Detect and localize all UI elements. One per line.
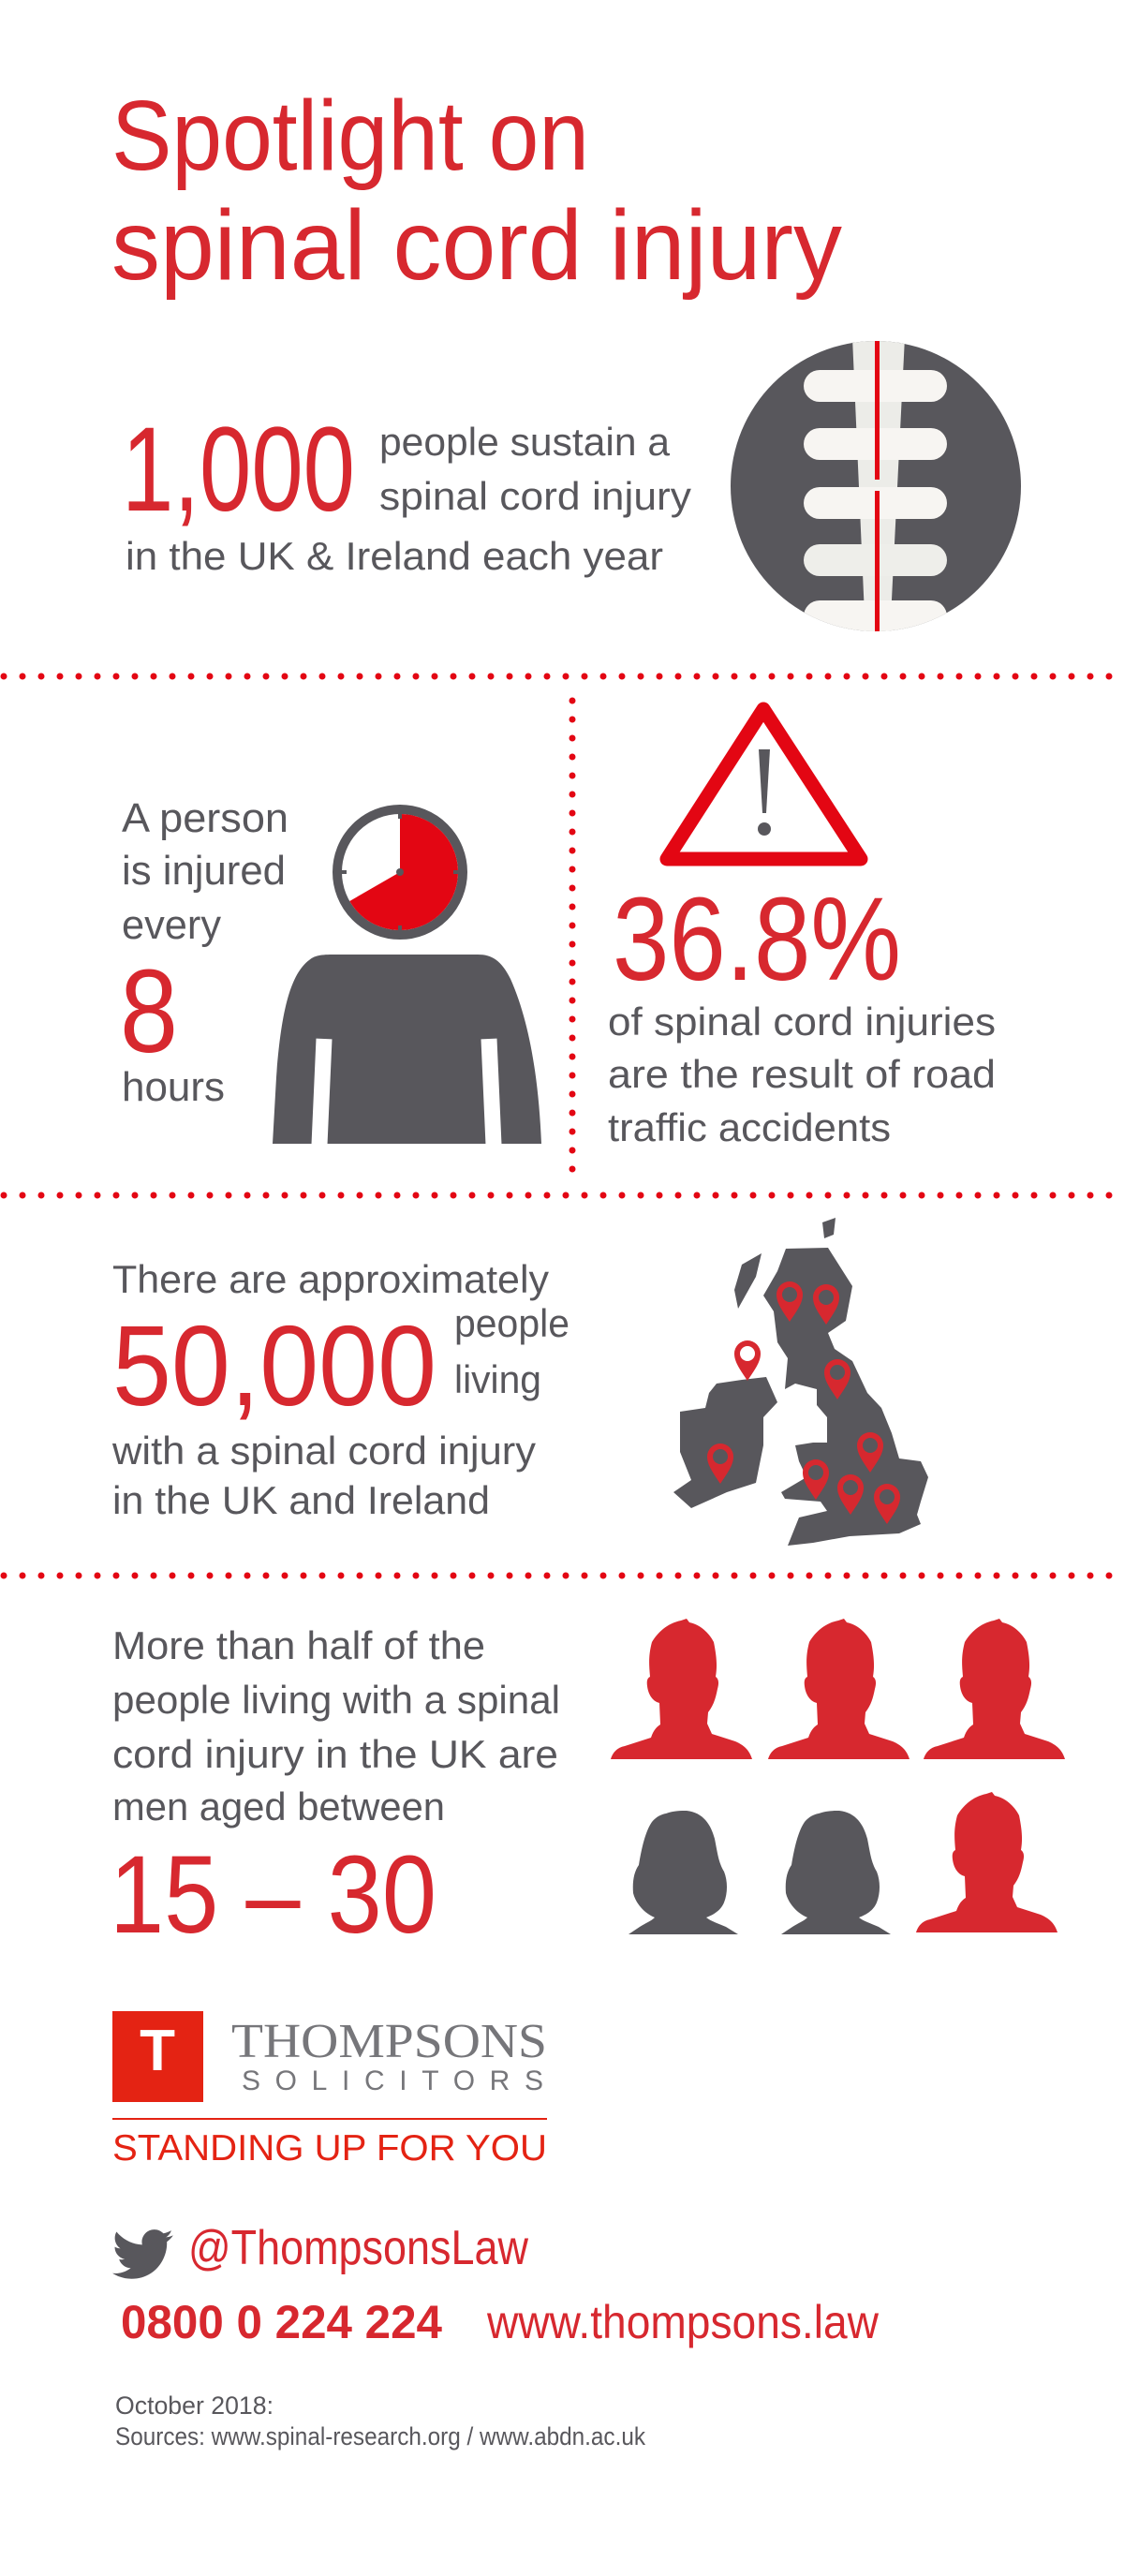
stat: 50,000 living: There are approximately [112, 1257, 549, 1301]
twitter handle [112, 2221, 528, 2279]
stat: 36.8% road traffic: traffic accidents [608, 1105, 891, 1149]
icon: warning triangle [667, 709, 861, 859]
stat: 36.8% road traffic: 36.8% [613, 873, 901, 1005]
stat: 50,000 living: with a spinal cord injury [111, 1429, 536, 1473]
logo: Thompsons Solicitors [112, 2011, 547, 2169]
logo: Thompsons Solicitors: T [140, 2019, 175, 2083]
sources: Sources: www.spinal-research.org / www.abdn.ac.uk [115, 2422, 645, 2450]
text: men aged 15-30 [110, 1623, 560, 1957]
icon: person body [273, 955, 541, 1145]
stat: 50,000 living: 50,000 [112, 1302, 436, 1429]
stat: 1,000 per year: people sustain a [379, 420, 671, 464]
text: men aged 15-30: men aged between [112, 1784, 445, 1828]
contact: phone and website: 0800 0 224 224 [121, 2296, 442, 2348]
text: injured every 8 hours: hours [122, 1064, 225, 1110]
stat: 1,000 per year: in the UK & Ireland each year [126, 534, 663, 578]
icons: people heads [611, 1619, 1065, 1934]
text: injured every 8 hours: is injured [122, 848, 286, 894]
text: injured every 8 hours [120, 795, 288, 1110]
stat: 50,000 living: people [454, 1301, 569, 1345]
text: injured every 8 hours: every [122, 902, 221, 948]
title [111, 81, 842, 301]
title: Spotlight on [111, 81, 589, 191]
icon: clock [337, 809, 463, 935]
map: UK and Ireland with pins [673, 1218, 928, 1546]
text: men aged 15-30: 15 – 30 [110, 1833, 436, 1957]
title: spinal cord injury [111, 190, 842, 301]
contact: phone and website: www.thompsons.law [486, 2296, 880, 2348]
sources [115, 2391, 645, 2450]
stat: 50,000 living: in the UK and Ireland [112, 1478, 490, 1522]
icon: spine [731, 337, 1021, 637]
stat: 1,000 per year: 1,000 [122, 403, 355, 537]
contact: phone and website [121, 2296, 880, 2348]
logo: Thompsons Solicitors: THOMPSONS [231, 2015, 547, 2068]
logo: Thompsons Solicitors: SOLICITORS [242, 2065, 543, 2096]
stat: 1,000 per year [122, 403, 691, 578]
twitter handle: @ThompsonsLaw [188, 2221, 528, 2275]
text: men aged 15-30: people living with a spinal [112, 1678, 560, 1722]
stat: 1,000 per year: spinal cord injury [379, 474, 691, 518]
sources: October 2018: [115, 2391, 274, 2420]
stat: 36.8% road traffic: are the result of road [608, 1052, 996, 1096]
logo: Thompsons Solicitors: STANDING UP FOR YOU [112, 2128, 547, 2169]
stat: 50,000 living [111, 1257, 569, 1522]
stat: 36.8% road traffic: of spinal cord injuries [608, 999, 996, 1044]
stat: 36.8% road traffic [608, 873, 996, 1149]
text: men aged 15-30: More than half of the [112, 1623, 485, 1667]
stat: 50,000 living: living [454, 1357, 541, 1401]
text: injured every 8 hours: 8 [120, 945, 178, 1077]
text: injured every 8 hours: A person [122, 795, 288, 841]
text: men aged 15-30: cord injury in the UK are [112, 1732, 558, 1776]
